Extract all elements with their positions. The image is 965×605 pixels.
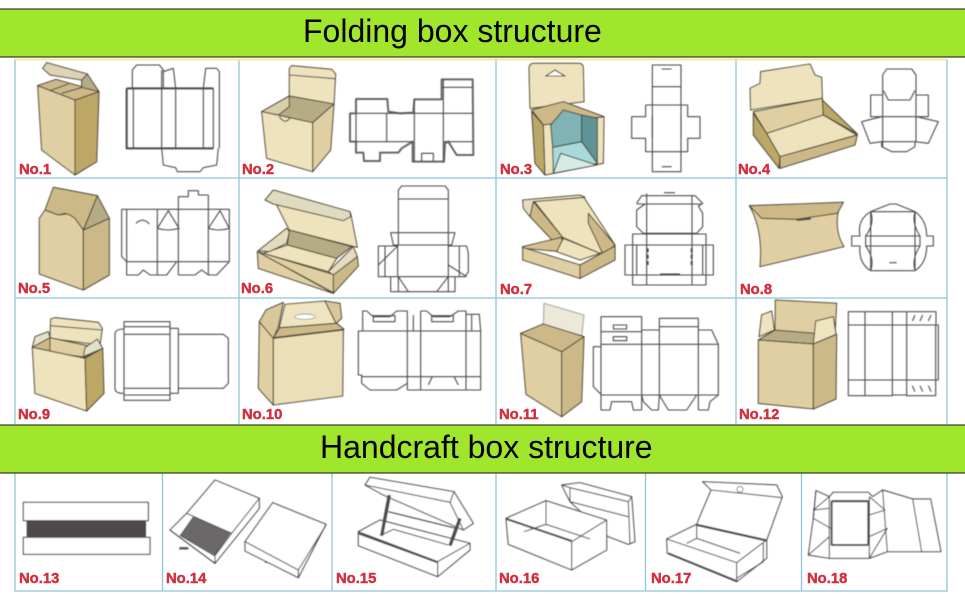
heading: folding box structure bbox=[0, 9, 965, 57]
number labels: No.4 bbox=[738, 162, 771, 178]
number labels: No.15 bbox=[336, 571, 376, 587]
number labels: No.8 bbox=[740, 282, 772, 298]
number labels: No.11 bbox=[499, 407, 538, 423]
number labels: No.5 bbox=[18, 281, 50, 297]
heading: handcraft box structure bbox=[0, 425, 965, 473]
number labels: No.10 bbox=[242, 407, 282, 423]
box No.6 bbox=[257, 186, 468, 293]
number labels: No.13 bbox=[19, 571, 59, 587]
number labels: No.7 bbox=[500, 282, 532, 298]
box No.1 bbox=[38, 63, 219, 175]
box No.17 bbox=[667, 482, 782, 582]
number labels: No.9 bbox=[18, 407, 50, 423]
box No.2 bbox=[262, 66, 473, 172]
number labels bbox=[18, 162, 847, 587]
number labels: No.14 bbox=[166, 571, 207, 587]
number labels: No.18 bbox=[807, 571, 847, 587]
box No.7 bbox=[523, 193, 713, 285]
number labels: No.17 bbox=[651, 571, 691, 587]
box No.3 bbox=[529, 63, 700, 175]
box No.13 bbox=[23, 502, 150, 554]
box No.18 bbox=[808, 490, 941, 558]
box No.11 bbox=[521, 303, 718, 417]
number labels: No.6 bbox=[241, 281, 273, 297]
box No.8 bbox=[749, 202, 933, 271]
box No.10 bbox=[258, 301, 481, 405]
heading: handcraft box structure: Handcraft box structure bbox=[320, 429, 653, 465]
number labels: No.3 bbox=[500, 162, 532, 178]
box No.14 bbox=[170, 480, 326, 578]
number labels: No.2 bbox=[242, 162, 274, 178]
box No.5 bbox=[39, 187, 229, 290]
heading: folding box structure: Folding box structure bbox=[303, 13, 602, 49]
box No.12 bbox=[758, 300, 938, 409]
number labels: No.1 bbox=[19, 162, 51, 178]
number labels: No.12 bbox=[739, 407, 779, 423]
box No.4 bbox=[750, 64, 938, 168]
number labels: No.16 bbox=[499, 571, 539, 587]
box No.15 bbox=[358, 477, 473, 577]
box No.9 bbox=[32, 318, 228, 411]
box No.16 bbox=[506, 483, 635, 570]
